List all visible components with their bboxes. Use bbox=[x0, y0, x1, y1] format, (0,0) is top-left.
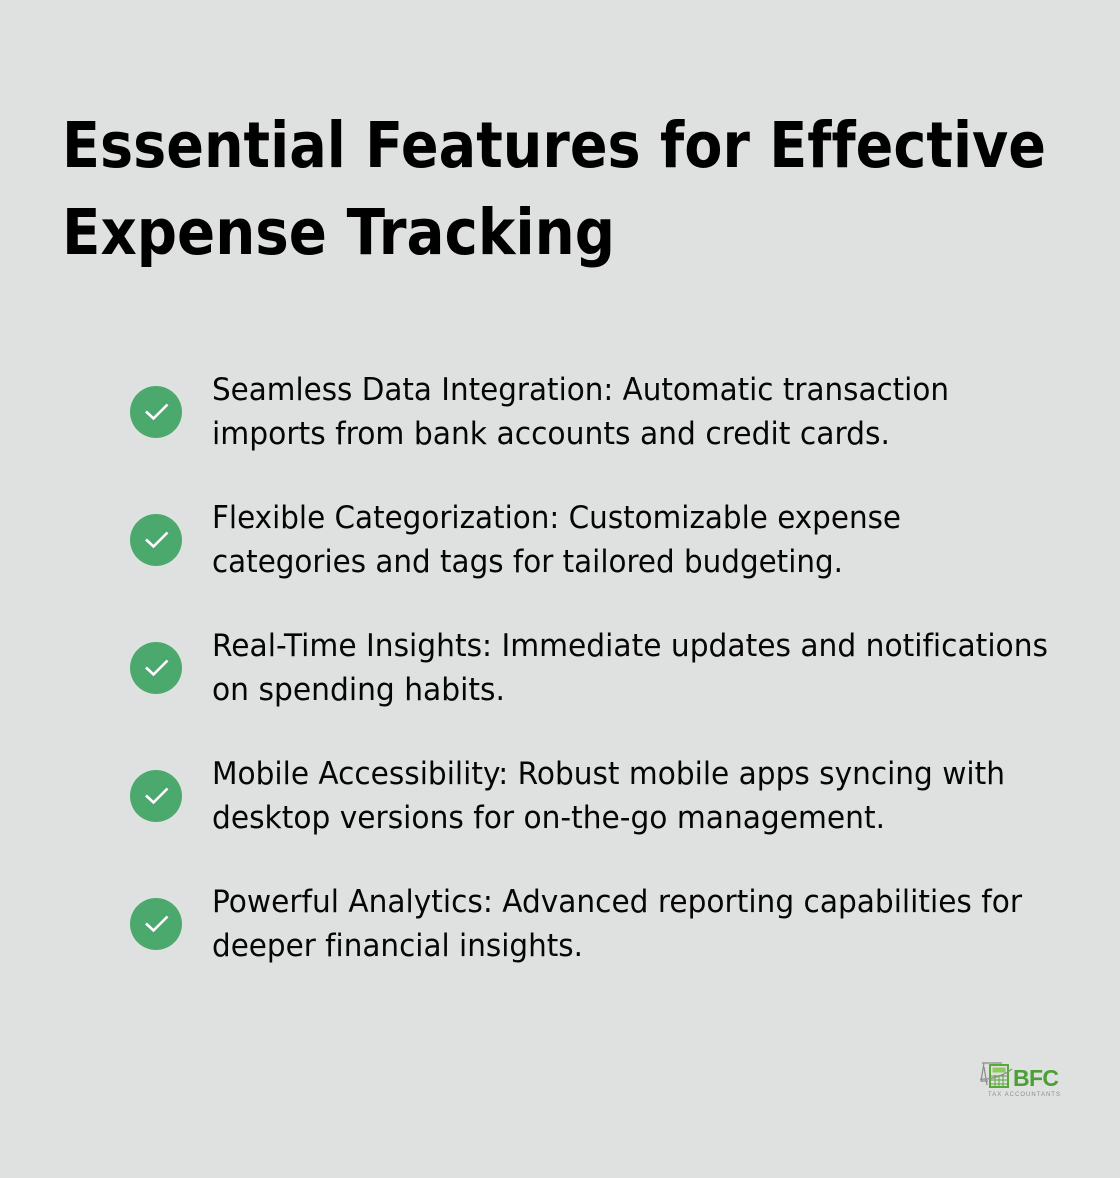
text: Seamless Data Integration: imports from bank accounts and credit cards. bbox=[212, 416, 890, 452]
title: Expense Tracking bbox=[62, 196, 615, 269]
text: Seamless Data Integration bbox=[212, 372, 949, 452]
text: Powerful Analytics bbox=[212, 884, 1022, 964]
list item: Seamless Data Integration bbox=[130, 372, 949, 452]
icon: green check circle bbox=[130, 642, 182, 694]
icon: green check circle bbox=[130, 770, 182, 822]
text: Real-Time Insights: on spending habits. bbox=[212, 672, 505, 708]
text: Powerful Analytics: deeper financial insights. bbox=[212, 928, 583, 964]
icon: calculator and papers bbox=[980, 1063, 1012, 1087]
list item: Real-Time Insights bbox=[130, 628, 1048, 708]
text: Mobile Accessibility bbox=[212, 756, 1005, 836]
logo: BFC Tax Accountants bbox=[980, 1063, 1060, 1098]
text: Flexible Categorization: categories and tags for tailored budgeting. bbox=[212, 544, 843, 580]
logo wordmark: BFC bbox=[1013, 1065, 1059, 1091]
text: Real-Time Insights bbox=[212, 628, 1048, 708]
text: Mobile Accessibility: Mobile Accessibility: Robust mobile apps syncing with bbox=[212, 756, 1005, 792]
text: Mobile Accessibility: desktop versions for on-the-go management. bbox=[212, 800, 885, 836]
title bbox=[62, 109, 1046, 269]
icon: green check circle bbox=[130, 514, 182, 566]
text: Flexible Categorization bbox=[212, 500, 901, 580]
text: Real-Time Insights: Real-Time Insights: Immediate updates and notifications bbox=[212, 628, 1048, 664]
list item: Flexible Categorization bbox=[130, 500, 901, 580]
logo tagline: TAX ACCOUNTANTS bbox=[988, 1092, 1060, 1098]
text: Flexible Categorization: Flexible Categorization: Customizable expense bbox=[212, 500, 901, 536]
text: Seamless Data Integration: Seamless Data Integration: Automatic transaction bbox=[212, 372, 949, 408]
icon: green check circle bbox=[130, 386, 182, 438]
text: Powerful Analytics: Powerful Analytics: Advanced reporting capabilities for bbox=[212, 884, 1022, 920]
list item: Mobile Accessibility bbox=[130, 756, 1005, 836]
icon: green check circle bbox=[130, 898, 182, 950]
list item: Powerful Analytics bbox=[130, 884, 1022, 964]
